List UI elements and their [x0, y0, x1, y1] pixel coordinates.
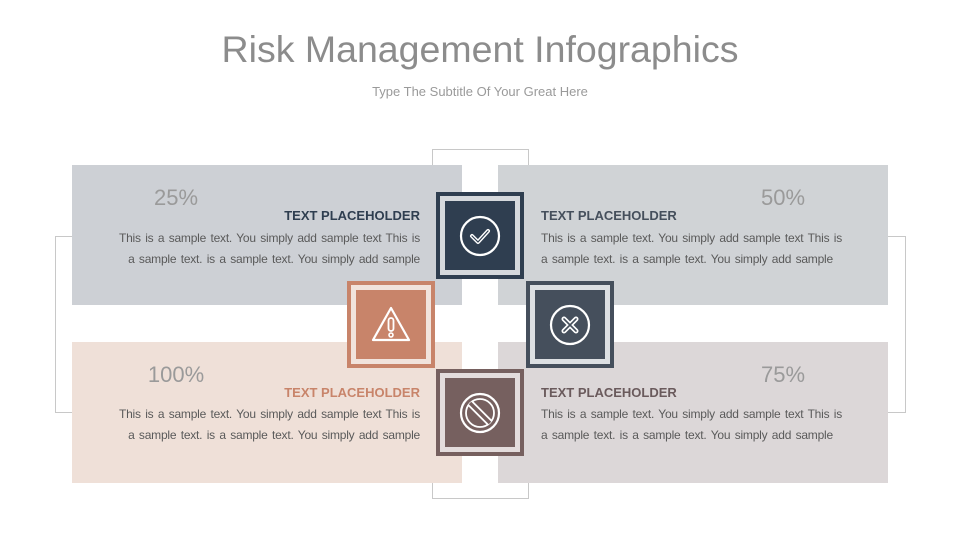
connector: left bracket	[55, 236, 85, 413]
percent 75%: 75%	[761, 362, 805, 387]
body text: a sample text. is a sample text. You simply add sample	[541, 428, 833, 442]
body text: a sample text. is a sample text. You simply add sample	[128, 428, 420, 442]
connector: bottom bracket	[432, 470, 529, 499]
icon: warning	[347, 281, 435, 368]
title: Risk Management Infographics	[222, 28, 738, 70]
body text: This is a sample text. You simply add sample text This is	[541, 231, 842, 245]
icon: ban	[436, 369, 524, 456]
body text	[119, 407, 420, 442]
connector: top bracket	[432, 149, 529, 179]
heading: TEXT PLACEHOLDER	[541, 208, 677, 223]
percent 100%: 100%	[148, 362, 204, 387]
panel: bottom-left	[72, 342, 462, 483]
body text: a sample text. is a sample text. You simply add sample	[541, 252, 833, 266]
body text: This is a sample text. You simply add sample text This is	[119, 231, 420, 245]
subtitle: Type The Subtitle Of Your Great Here	[372, 84, 588, 99]
heading: TEXT PLACEHOLDER	[284, 385, 420, 400]
body text	[541, 231, 842, 266]
heading: TEXT PLACEHOLDER	[284, 208, 420, 223]
icon: check	[436, 192, 524, 279]
panel: bottom-right	[498, 342, 888, 483]
percent 25%: 25%	[154, 185, 198, 210]
icon: cancel	[526, 281, 614, 368]
percent 50%: 50%	[761, 185, 805, 210]
body text: This is a sample text. You simply add sample text This is	[541, 407, 842, 421]
body text: This is a sample text. You simply add sample text This is	[119, 407, 420, 421]
body text	[541, 407, 842, 442]
connector: right bracket	[876, 236, 906, 413]
panel: top-left	[72, 165, 462, 305]
body text	[119, 231, 420, 266]
heading: TEXT PLACEHOLDER	[541, 385, 677, 400]
panel: top-right	[498, 165, 888, 305]
body text: a sample text. is a sample text. You simply add sample	[128, 252, 420, 266]
